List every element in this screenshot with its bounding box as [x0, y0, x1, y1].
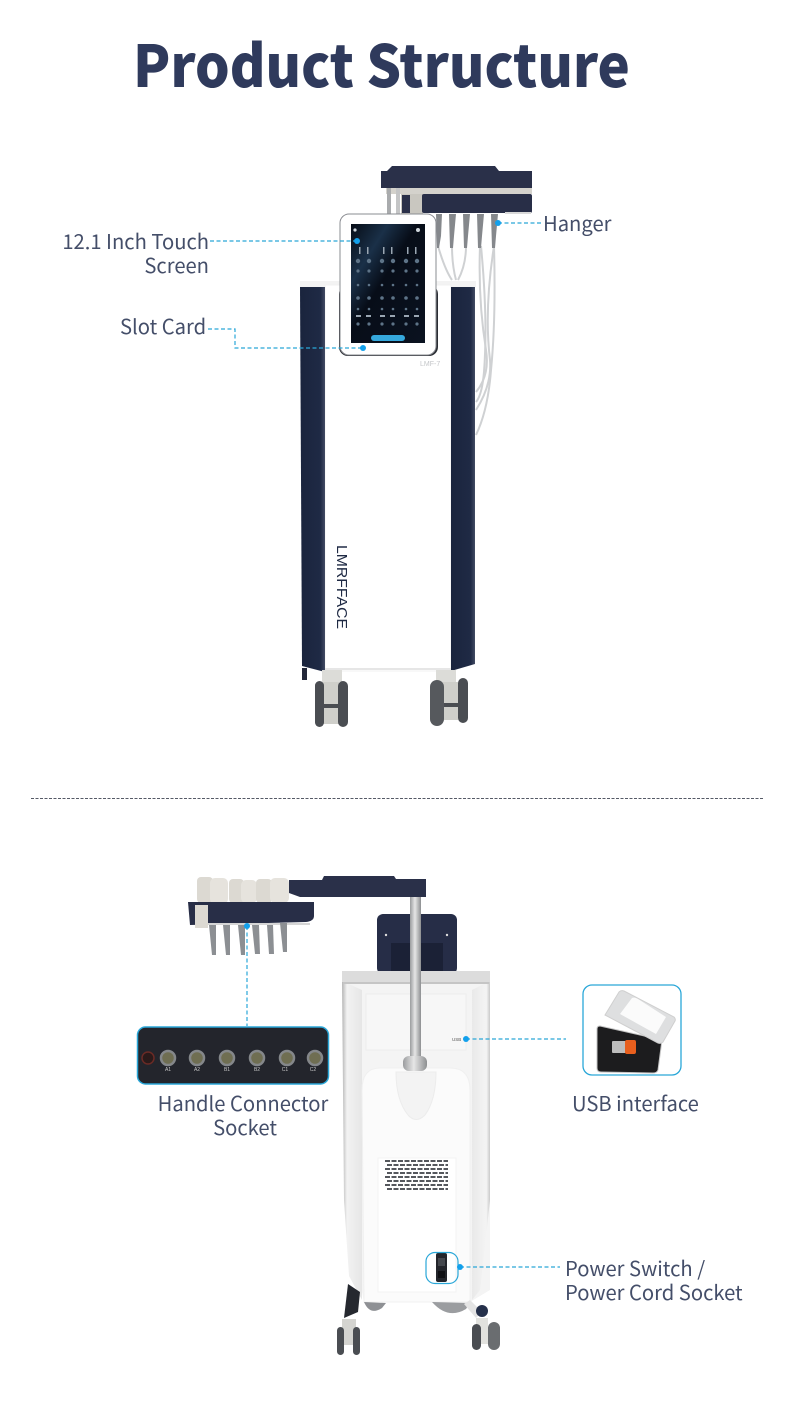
pole — [403, 896, 427, 1071]
casters — [302, 668, 468, 727]
cabinet: LMF-7 — [420, 361, 440, 368]
cables — [438, 246, 495, 435]
power socket — [436, 1253, 447, 1282]
tips — [209, 923, 287, 955]
callout: handle connector socket: Socket — [213, 1112, 277, 1141]
cabinet — [300, 281, 476, 672]
brand text: LMRFFACE — [333, 545, 350, 629]
callout: handle connector socket — [138, 923, 329, 1141]
callout: touch screen: Screen — [144, 250, 209, 279]
callout: power socket: Power Switch / — [565, 1253, 705, 1282]
hanger arm — [381, 166, 532, 214]
callout: USB interface — [452, 985, 699, 1117]
callout: touch screen: 12.1 Inch Touch — [62, 226, 209, 255]
rear panel — [377, 914, 457, 974]
connector panel: B1 — [224, 1067, 230, 1073]
callout: power socket — [426, 1252, 743, 1306]
connector panel — [138, 1027, 328, 1084]
machine: front view — [300, 166, 532, 727]
machine: back view — [188, 876, 500, 1355]
handles — [436, 214, 498, 248]
callout: hanger: Hanger — [543, 208, 612, 237]
vent grille — [385, 1161, 448, 1189]
callout: USB interface: USB interface — [572, 1088, 699, 1117]
connector panel: C2 — [310, 1067, 316, 1073]
callout: touch screen — [62, 226, 360, 279]
casters — [337, 1284, 500, 1355]
connector panel: A2 — [194, 1067, 200, 1073]
callout: power socket: Power Cord Socket — [565, 1277, 743, 1306]
callout: USB interface: USB — [452, 1037, 461, 1042]
connector panel: A1 — [165, 1067, 171, 1073]
title: Product Structure — [133, 20, 630, 104]
USB photo — [583, 985, 681, 1075]
pole bell — [396, 1072, 436, 1120]
callout: handle connector socket: Handle Connector — [158, 1088, 329, 1117]
callout: slot card — [120, 311, 366, 351]
connector panel: C1 — [282, 1067, 288, 1073]
cabinet rear — [342, 971, 490, 1302]
callout: hanger — [495, 208, 612, 237]
connector panel: B2 — [254, 1067, 260, 1073]
callout: slot card: Slot Card — [120, 311, 206, 340]
touch screen — [339, 214, 438, 356]
handles module — [188, 877, 314, 928]
arm — [289, 876, 426, 897]
